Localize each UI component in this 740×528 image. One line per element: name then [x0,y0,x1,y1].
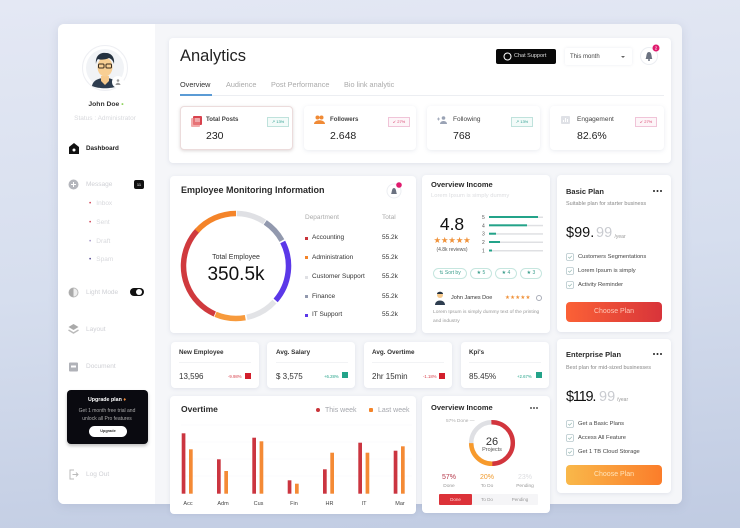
nav: message: Message [86,180,112,188]
legend [316,406,410,414]
plan features [566,420,640,456]
row: customer support [305,273,398,280]
kpi: avg overtime: Avg. Overtime [372,348,414,356]
department table: Department [305,214,339,221]
stat: done: Done [443,484,455,489]
stat: to do: 20% [480,474,494,481]
submenu: inbox: • Inbox [89,200,112,207]
rating bars: 4 [482,223,485,229]
rating stars: ★★★★★ [433,235,471,245]
panel heading: Overtime [181,404,218,414]
app window [58,24,682,504]
kpi: avg salary [267,342,355,388]
rating bars: 5 [482,215,485,221]
stat: done: 57% [442,474,456,481]
donut chart: projects [468,419,516,467]
filter chips: ⇅ Sort by [439,270,461,276]
row: finance: Finance [312,292,335,300]
badge: trend up [511,117,533,127]
filter chips: ★ 3 [527,270,535,276]
panel heading: Overview Income [431,180,493,189]
bar chart [182,433,405,507]
donut value: 350.5k [207,264,265,285]
plan features: Get a Basic Plans [578,421,624,427]
panel: enterprise plan [557,339,671,493]
upgrade card [67,390,148,444]
nav: light mode [68,288,144,298]
panel: basic plan [557,175,671,332]
button: chat support: Chat Support [514,53,546,59]
filter chips: ★ 4 [502,270,510,276]
nav: document: Document [86,362,116,370]
plan price: $119. [566,388,595,404]
row: accounting: 55.2k [382,234,398,241]
stat card: total posts: 230 [206,130,224,142]
row: customer support: 55.2k [382,273,398,280]
icon: posts [191,116,202,127]
plan features: Get 1 TB Cloud Storage [578,449,640,455]
row: finance [305,292,398,300]
button: choose plan [566,302,662,322]
stat card: engagement: 82.6% [577,130,607,142]
bar chart: Cus [254,501,264,507]
nav: layout: Layout [86,326,106,332]
icon: engagement [561,116,570,124]
panel heading: Employee Monitoring Information [181,184,324,194]
tab: audience: Audience [226,80,256,89]
kpi: new employee: New Employee [179,348,223,356]
plan price [566,225,626,241]
row: administration: Administration [312,254,353,260]
stat card: followers: Followers [330,116,358,123]
plan features: Lorem Ipsum is simply [578,268,636,274]
rating value: 4.8 [440,214,464,234]
kpi: avg salary: Avg. Salary [276,348,310,356]
review: ★★★★★ [505,294,531,300]
stat card: engagement [550,106,664,150]
panel: overview income reviews [422,175,550,333]
nav: layout [68,324,106,334]
nav: message [68,180,144,190]
icon: notification bell: 2 [655,46,658,51]
button: choose plan: Choose Plan [594,308,634,315]
kpi: new employee [171,342,259,388]
rating bars: 3 [482,232,485,238]
kpi: kpi's [461,342,549,388]
stat: pending: 23% [518,474,532,481]
department table [305,214,398,318]
plan features: Customers Segmentations [578,254,646,260]
review: and industry [433,318,460,324]
tab: bio link analytic: Bio link analytic [344,80,394,89]
submenu: sent: • Sent [89,219,110,226]
page title: Analytics [180,47,246,65]
row: customer support: Customer Support [312,273,365,280]
segmented tabs: To Do [481,497,493,502]
stat: pending [516,474,534,492]
kpi: new employee: -9.98% [228,374,242,378]
kpi: avg salary: +6.28% [324,374,339,378]
stat card: followers: 2.648 [330,130,356,142]
badge: trend up: ↗ 13% [272,119,284,124]
icon: notification bell [640,44,660,65]
nav: document [69,362,116,372]
stat card: total posts: Total Posts [206,116,238,123]
plan description: Best plan for mid-sized businesses [566,364,651,370]
rating bars: 1 [482,248,485,254]
legend: This week [325,407,357,414]
donut chart: total employee [180,210,292,322]
icon: bell [386,182,402,198]
segmented tabs [439,494,538,505]
row: administration: 55.2k [382,254,398,260]
row: finance: 55.2k [382,292,398,300]
stat: pending: Pending [516,484,534,489]
plan price: $99. [566,225,594,241]
legend: Last week [378,407,410,414]
plan price [566,388,628,404]
plan price: 99 [599,388,615,404]
plan name: Basic Plan [566,187,604,196]
kpi: avg overtime [364,342,452,388]
upgrade description [78,408,136,422]
segmented tabs: Pending [512,497,528,502]
profile avatar [82,45,128,91]
panel: employee monitoring [170,176,416,333]
donut label: total employee: Total Employee [212,254,260,261]
dropdown: this month: This month [570,54,600,60]
bar chart: Fin [290,501,298,507]
button: choose plan [566,465,662,485]
stat card: following: 768 [453,130,471,142]
filter chips: ★ 5 [477,270,485,276]
upgrade button [89,426,127,437]
upgrade description: Get 1 month free trial and [79,408,135,414]
panel: sidebar [58,24,155,504]
donut label: Projects [482,446,502,452]
bar chart: Adm [217,501,229,507]
plan features: Access All Feature [578,435,626,441]
kpi: avg overtime: 2hr 15min [372,372,408,380]
panel: overview income projects [422,396,550,513]
stat card: total posts [180,106,293,150]
review: Lorem Ipsum is simply dummy text of the printing [433,310,539,315]
nav: message: 11 [137,182,141,187]
segmented tabs: Done [450,497,461,502]
stat: to do [480,474,494,492]
submenu: draft: • Draft [89,238,110,245]
plan features: Activity Reminder [578,282,623,288]
menu dots [653,190,662,192]
panel: overtime chart [170,396,416,514]
upgrade description: unlock all Pro features [82,416,132,422]
bar chart: IT [362,501,367,507]
stat card: engagement: Engagement [577,116,614,123]
menu dots [530,407,538,409]
stat card: followers [304,106,416,150]
badge: trend up [267,117,289,127]
tab: post performance: Post Performance [271,80,329,89]
button: choose plan: Choose Plan [594,471,634,478]
panel: header [169,38,671,163]
bar chart: Mar [395,501,405,507]
icon: followers [314,116,325,124]
row: it support: 55.2k [382,311,398,318]
department table: Total [382,214,396,221]
panel heading: Overview Income [431,402,493,412]
nav: dashboard [69,143,119,154]
row: it support: IT Support [312,311,342,318]
kpi: kpi's: Kpi's [469,348,484,356]
user name: John Doe • [88,101,124,108]
rating bars: 2 [482,240,485,246]
donut annotation: 57% Done — [446,419,475,424]
review [433,292,542,324]
stat: to do: To Do [481,484,493,489]
badge: trend up: ↗ 13% [516,119,528,124]
menu dots [653,353,662,355]
badge: trend down: ↙ 27% [640,119,652,124]
badge: trend down [635,117,657,127]
rating bars [482,215,543,254]
plan price: 99 [596,225,612,241]
reviewer avatar [435,292,445,305]
stat card: following: Following [453,116,480,123]
plan price: /year [617,397,628,403]
review: John James Doe [451,294,492,300]
tabs [180,80,664,96]
badge: trend down: ↙ 27% [393,119,405,124]
bar chart: HR [326,501,333,507]
row: administration [305,254,398,260]
reviews count: (4.8k reviews) [436,247,468,253]
plan price: /year [614,234,626,240]
icon: following [437,116,447,124]
stat: done [442,474,456,492]
user status: Status : Administrator [74,114,136,122]
nav: light mode: Light Mode [86,288,118,296]
row: accounting: Accounting [312,234,344,241]
stat card: following [427,106,540,150]
kpi: avg salary: $ 3,575 [276,372,303,380]
submenu: spam: • Spam [89,256,113,263]
kpi: new employee: 13,596 [179,372,203,380]
kpi: avg overtime: -1.18% [423,374,437,378]
filter chips [433,268,542,279]
nav: log out [70,470,110,480]
plan features [566,253,646,289]
dropdown: this month [565,48,632,65]
nav: log out: Log Out [86,470,109,478]
button: chat support [496,49,556,64]
upgrade heading: Upgrade plan ♦ [88,397,126,403]
plan description: Suitable plan for starter business [566,200,646,206]
donut value: 26 [486,436,498,448]
nav: dashboard: Dashboard [86,144,119,152]
row: it support [305,311,398,318]
upgrade button: Upgrade [100,429,116,433]
tab: overview: Overview [180,80,210,89]
kpi: kpi's: +2.67% [517,374,532,378]
row: accounting [305,234,398,241]
kpi: kpi's: 85.45% [469,372,496,380]
badge: trend down [388,117,410,127]
panel subtitle: Lorem Ipsum is simply dummy [431,193,509,199]
plan name: Enterprise Plan [566,350,621,358]
bar chart: Acc [183,501,193,507]
